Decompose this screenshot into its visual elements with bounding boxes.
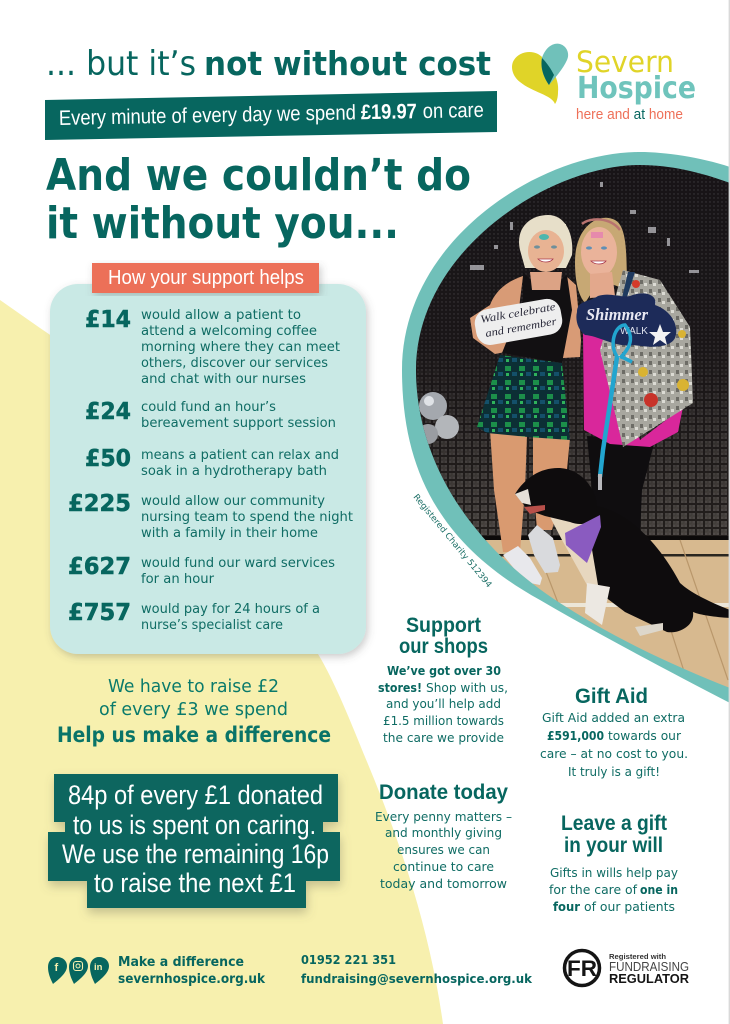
- sign: Shimmer Walk: WALK: [620, 326, 648, 337]
- title: ... but it’s: [46, 44, 196, 84]
- logo: Severn Hospice: here and at home: [576, 106, 683, 123]
- heading: And we couldn’t do: [46, 150, 471, 201]
- gift aid: Gift Aid: [575, 685, 648, 708]
- item: £14: others, discover our services: [141, 356, 328, 371]
- item: £24: could fund an hour’s: [141, 400, 276, 415]
- footer: website: severnhospice.org.uk: [118, 972, 265, 987]
- callout: 84p of every £1: We use the remaining 16p: [62, 839, 329, 869]
- footer: contact: 01952 221 351: [301, 952, 396, 967]
- fundraising regulator logo: Registered with: [609, 952, 666, 961]
- footer: contact: fundraising@severnhospice.org.uk: [301, 971, 533, 986]
- gift aid: [540, 685, 688, 779]
- item: £757: £757: [68, 600, 131, 626]
- title: not without cost: [204, 44, 491, 83]
- fundraising regulator logo: REGULATOR: [609, 971, 690, 986]
- donate today: today and tomorrow: [380, 877, 507, 891]
- support our shops: our shops: [399, 635, 488, 658]
- support our shops: stores!: [378, 681, 422, 695]
- item: £225: with a family in their home: [141, 526, 318, 541]
- footer: website: Make a difference: [118, 955, 244, 970]
- gift aid: £591,000: [547, 729, 604, 743]
- sign: Shimmer Walk: [576, 293, 676, 347]
- item: £50: £50: [85, 446, 131, 472]
- title: [46, 44, 491, 84]
- item: £627: [68, 554, 335, 587]
- item: £225: nursing team to spend the night: [141, 510, 353, 525]
- shoes: [503, 546, 542, 585]
- icon: facebook: f: [54, 962, 58, 974]
- sequin jacket: [600, 270, 693, 447]
- callout: 84p of every £1: to us is spent on caring.: [73, 810, 316, 840]
- banner: cost per minute: Every minute of every day we spend: [59, 101, 356, 130]
- item: £50: soak in a hydrotherapy bath: [141, 464, 327, 479]
- support our shops: [378, 614, 508, 745]
- leave a gift in your will: for the care of: [549, 883, 638, 897]
- icon: instagram: [69, 957, 88, 984]
- item: £757: nurse’s specialist care: [141, 618, 283, 633]
- sign: walk celebrate: [474, 298, 562, 345]
- logo: Severn Hospice: Hospice: [577, 71, 696, 106]
- text block: raise £2 of every £3: Help us make a difference: [57, 723, 331, 747]
- sign: walk celebrate: Walk celebrate: [479, 301, 556, 326]
- photo panel with teal border: [400, 150, 730, 703]
- item: £24: bereavement support session: [141, 416, 336, 431]
- item: £14: and chat with our nurses: [141, 372, 306, 387]
- item: £225: £225: [68, 491, 131, 517]
- item: £14: morning where they can meet: [141, 340, 340, 355]
- tab heading: [92, 263, 319, 293]
- item: £627: £627: [68, 554, 131, 580]
- pink top: [583, 333, 683, 447]
- item: £14: £14: [85, 307, 131, 333]
- callout: 84p of every £1: 84p of every £1 donated: [68, 780, 323, 810]
- woman right hair: [575, 218, 628, 303]
- fundraising regulator logo: [564, 950, 690, 986]
- leave a gift in your will: one in: [640, 883, 678, 897]
- sign: Shimmer Walk: Shimmer: [586, 305, 648, 324]
- callout: 84p of every £1: [48, 774, 340, 908]
- gift aid: It truly is a gift!: [568, 765, 660, 779]
- gift aid: care – at no cost to you.: [540, 747, 688, 761]
- yellow background shape: [0, 300, 443, 1024]
- item: £757: [68, 600, 320, 633]
- gift aid: towards our: [608, 729, 681, 743]
- support our shops: Shop with us,: [426, 681, 508, 695]
- woman left arms: [470, 276, 581, 358]
- support our shops: Support: [406, 614, 481, 637]
- icon: heart: [512, 44, 568, 104]
- footer: website: [118, 955, 265, 987]
- item: £50: [85, 446, 339, 479]
- balloons: [418, 392, 459, 444]
- donate today: continue to care: [393, 860, 494, 874]
- gift aid: Gift Aid added an extra: [542, 711, 685, 725]
- donate today: Every penny matters –: [375, 810, 512, 824]
- woman left legs: [490, 430, 570, 552]
- item: £225: [68, 491, 353, 541]
- banner: cost per minute: on care: [423, 99, 484, 123]
- item: £50: means a patient can relax and: [141, 448, 339, 463]
- item: £757: would pay for 24 hours of a: [141, 602, 320, 617]
- social icons: [48, 957, 109, 984]
- support our shops: We’ve got over 30: [387, 664, 501, 678]
- woman right face: [581, 227, 617, 277]
- banner: cost per minute: £19.97: [361, 100, 417, 124]
- donate today: ensures we can: [397, 843, 490, 857]
- white edge line: [729, 0, 730, 1024]
- heading: it without you...: [46, 198, 399, 249]
- photo: two women and a dog at Shimmer Walk: [400, 150, 730, 700]
- item: £627: for an hour: [141, 572, 215, 587]
- item: £14: would allow a patient to: [141, 308, 301, 323]
- sequin shorts: [477, 355, 570, 440]
- sign: walk celebrate: and remember: [484, 315, 558, 340]
- item: £627: would fund our ward services: [141, 556, 335, 571]
- leave a gift in your will: in your will: [564, 834, 663, 857]
- tab heading: How your support helps: [108, 267, 304, 289]
- support our shops: and you’ll help add: [386, 697, 501, 711]
- text block: raise £2 of every £3: of every £3 we spend: [99, 699, 288, 720]
- leave a gift in your will: of our patients: [584, 900, 675, 914]
- heading: [46, 150, 471, 249]
- donate today: [375, 781, 512, 891]
- lead: [598, 325, 632, 490]
- backdrop sparkle: [470, 182, 699, 273]
- item: £24: [85, 399, 336, 431]
- banner: cost per minute: [45, 91, 497, 140]
- fundraising regulator logo: FUNDRAISING: [609, 960, 689, 974]
- woman left top: [502, 272, 572, 363]
- fundraising regulator logo: FR: [567, 956, 597, 981]
- item: £24: £24: [85, 399, 131, 425]
- text block: raise £2 of every £3: [57, 676, 331, 747]
- logo: Severn Hospice: Severn: [576, 45, 674, 79]
- text block: raise £2 of every £3: We have to raise £2: [108, 676, 279, 697]
- panel: how your support helps: [50, 263, 366, 654]
- leave a gift in your will: Leave a gift: [561, 812, 667, 835]
- item: £14: [85, 307, 340, 387]
- leave a gift in your will: four: [553, 900, 580, 914]
- leave a gift in your will: [549, 812, 678, 914]
- registered charity note: Registered Charity 512394: [411, 493, 493, 590]
- donate today: and monthly giving: [385, 826, 502, 840]
- donate today: Donate today: [379, 781, 508, 804]
- woman left head: [519, 215, 572, 268]
- leave a gift in your will: Gifts in wills help pay: [550, 866, 678, 880]
- item: £225: would allow our community: [141, 494, 325, 509]
- icon: linkedin: in: [94, 962, 103, 973]
- item: £14: attend a welcoming coffee: [141, 324, 317, 339]
- logo: Severn Hospice: [512, 44, 696, 123]
- callout: 84p of every £1: to raise the next £1: [94, 868, 296, 898]
- woman right leggings: [587, 436, 655, 535]
- footer: contact: [301, 952, 533, 986]
- dog: [515, 468, 730, 636]
- support our shops: the care we provide: [383, 731, 504, 745]
- support our shops: £1.5 million towards: [383, 714, 504, 728]
